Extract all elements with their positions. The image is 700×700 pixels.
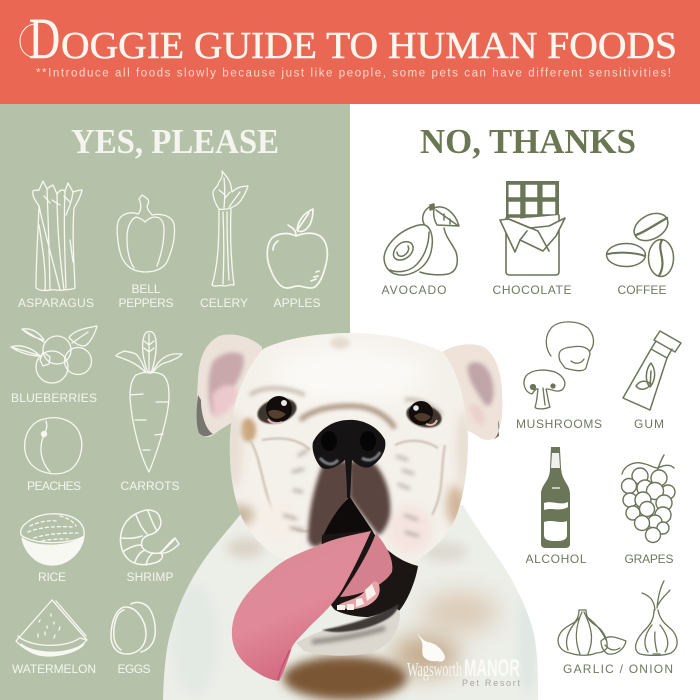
icon: peach	[25, 418, 82, 474]
icon: coffee beans	[606, 208, 674, 276]
subtitle note: **Introduce all foods slowly because just like people, some pets can have different sensitivities!	[36, 68, 671, 80]
logo: wagsworth manor	[407, 633, 520, 688]
icon: mushrooms	[524, 322, 594, 409]
icon: beer bottle	[541, 447, 570, 548]
dog head	[226, 333, 471, 563]
label: celery: CELERY	[200, 296, 248, 310]
title: D	[29, 6, 60, 71]
label: carrots: CARROTS	[120, 479, 180, 493]
icon: watermelon	[16, 600, 87, 656]
icon: onion	[636, 581, 677, 655]
label: rice: RICE	[38, 570, 66, 584]
background panel: yes side	[0, 104, 350, 700]
label: blueberries: BLUEBERRIES	[11, 391, 97, 405]
icon: eggs	[111, 602, 155, 654]
label: watermelon: WATERMELON	[12, 662, 96, 676]
dog tongue	[232, 531, 371, 681]
label: peaches: PEACHES	[27, 479, 81, 493]
label: asparagus: ASPARAGUS	[18, 296, 94, 310]
icon: celery	[212, 171, 248, 286]
label: gum: GUM	[634, 417, 664, 431]
icon: gum	[623, 331, 681, 410]
background panel: no side	[350, 104, 700, 700]
icon: apple	[267, 209, 327, 288]
icon: asparagus	[33, 181, 82, 291]
dog eye left	[255, 394, 299, 428]
dog ear right	[442, 344, 502, 440]
logo manor: MANOR	[464, 655, 520, 682]
panel: no thanks	[382, 122, 681, 676]
dog body	[160, 500, 540, 700]
icon: shrimp	[120, 510, 179, 565]
label: bell peppers: BELL	[132, 282, 161, 296]
header banner	[0, 0, 700, 104]
label: apples: APPLES	[274, 296, 320, 310]
icon: garlic	[558, 610, 626, 655]
panel: yes please	[11, 122, 327, 676]
title	[20, 6, 677, 71]
heading: no thanks: NO, THANKS	[420, 122, 636, 161]
label: coffee: COFFEE	[618, 283, 666, 297]
icon: blueberries	[11, 326, 97, 383]
label: alcohol: ALCOHOL	[526, 552, 587, 566]
logo tagline: Pet Resort	[462, 678, 520, 688]
dog ear left	[197, 334, 262, 437]
dog muzzle markings	[308, 461, 390, 547]
label: bell peppers: PEPPERS	[118, 296, 174, 310]
icon: grapes	[622, 455, 675, 542]
title: OGGIE GUIDE TO HUMAN FOODS	[61, 25, 677, 67]
dog eye right	[404, 401, 444, 431]
icon: bell pepper	[117, 195, 175, 272]
label: grapes: GRAPES	[624, 552, 674, 566]
label: avocado: AVOCADO	[382, 283, 446, 297]
label: garlic and onion: GARLIC / ONION	[563, 662, 673, 676]
tongue crease	[278, 650, 290, 680]
label: bell peppers	[118, 282, 174, 310]
dog chin	[296, 604, 400, 656]
icon: rice bowl	[21, 514, 84, 565]
icon: avocado	[384, 204, 459, 275]
dog nose	[313, 420, 385, 498]
label: chocolate: CHOCOLATE	[492, 283, 572, 297]
dog mouth interior	[322, 497, 418, 617]
bulldog photo illustration	[160, 333, 540, 700]
heading: yes please: YES, PLEASE	[71, 122, 279, 161]
label: eggs: EGGS	[118, 662, 150, 676]
logo dog icon	[417, 633, 445, 662]
logo wordmark: Wagsworth	[407, 659, 462, 681]
label: shrimp: SHRIMP	[126, 570, 174, 584]
label: mushrooms: MUSHROOMS	[516, 417, 602, 431]
icon: chocolate bar	[500, 181, 565, 275]
icon: carrot	[116, 332, 182, 472]
